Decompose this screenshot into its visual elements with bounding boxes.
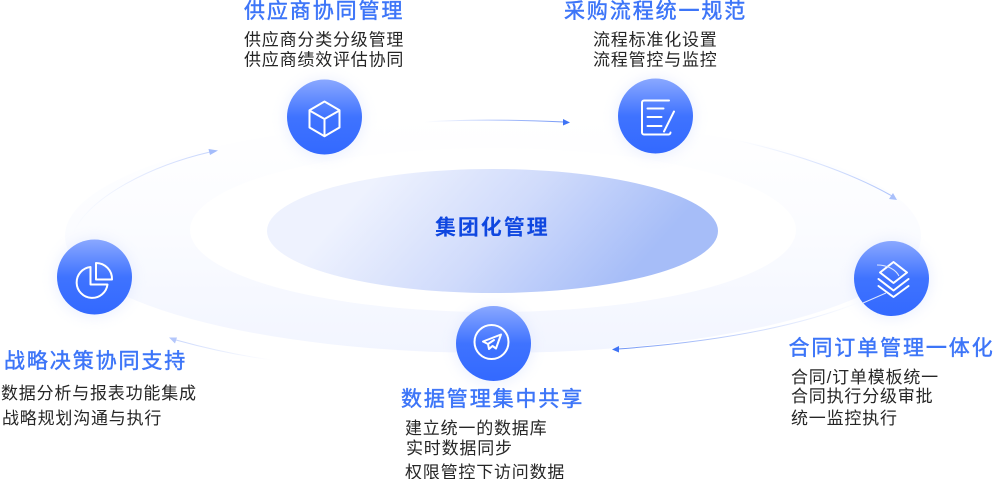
central ellipse with label [267, 169, 718, 293]
icon: paper plane [474, 325, 508, 359]
heading: strategy decision: 战略决策协同支持 [4, 350, 187, 373]
arrow: contract to data [612, 302, 860, 352]
text: process details: 流程管控与监控 [593, 50, 718, 70]
node: supplier collaboration [286, 79, 364, 157]
text: data details [405, 419, 565, 479]
text: contract details: 统一监控执行 [791, 409, 898, 428]
heading: supplier collaboration: 供应商协同管理 [244, 0, 404, 23]
icon: pie chart [77, 263, 112, 298]
text: strategy details: 战略规划沟通与执行 [2, 409, 162, 428]
arrow: data to strategy [169, 338, 272, 360]
central ellipse with label: 集团化管理 [435, 216, 550, 240]
text: supplier details: 供应商绩效评估协同 [244, 50, 404, 70]
arrow: process to contract [735, 140, 897, 200]
text: contract details [791, 368, 939, 428]
text: contract details: 合同/订单模板统一 [791, 368, 939, 387]
text: process details [593, 30, 718, 70]
icon: stacked layers [878, 262, 908, 297]
icon: cube [310, 102, 340, 136]
text: strategy details [1, 384, 197, 428]
text: supplier details: 供应商分类分级管理 [244, 30, 404, 50]
text: contract details: 合同执行分级审批 [791, 387, 933, 406]
icon: document with pen [642, 100, 674, 134]
node: data management [454, 306, 532, 384]
node: process standardization [616, 78, 694, 156]
text: data details: 建立统一的数据库 [405, 419, 547, 438]
heading: data management: 数据管理集中共享 [401, 388, 584, 411]
arrow: strategy to supplier [72, 149, 218, 236]
text: strategy details: 数据分析与报表功能集成 [1, 384, 197, 403]
middle white ellipse [190, 148, 796, 312]
heading: contract and order: 合同订单管理一体化 [788, 337, 993, 360]
node: contract and order [852, 240, 930, 318]
text: data details: 实时数据同步 [406, 439, 513, 458]
heading: process standardization: 采购流程统一规范 [564, 0, 747, 23]
text: supplier details [244, 30, 404, 70]
outer ring ellipse [65, 119, 921, 353]
text: process details: 流程标准化设置 [593, 30, 718, 50]
arrow: supplier to process [425, 119, 570, 126]
node: strategy decision [56, 239, 134, 317]
